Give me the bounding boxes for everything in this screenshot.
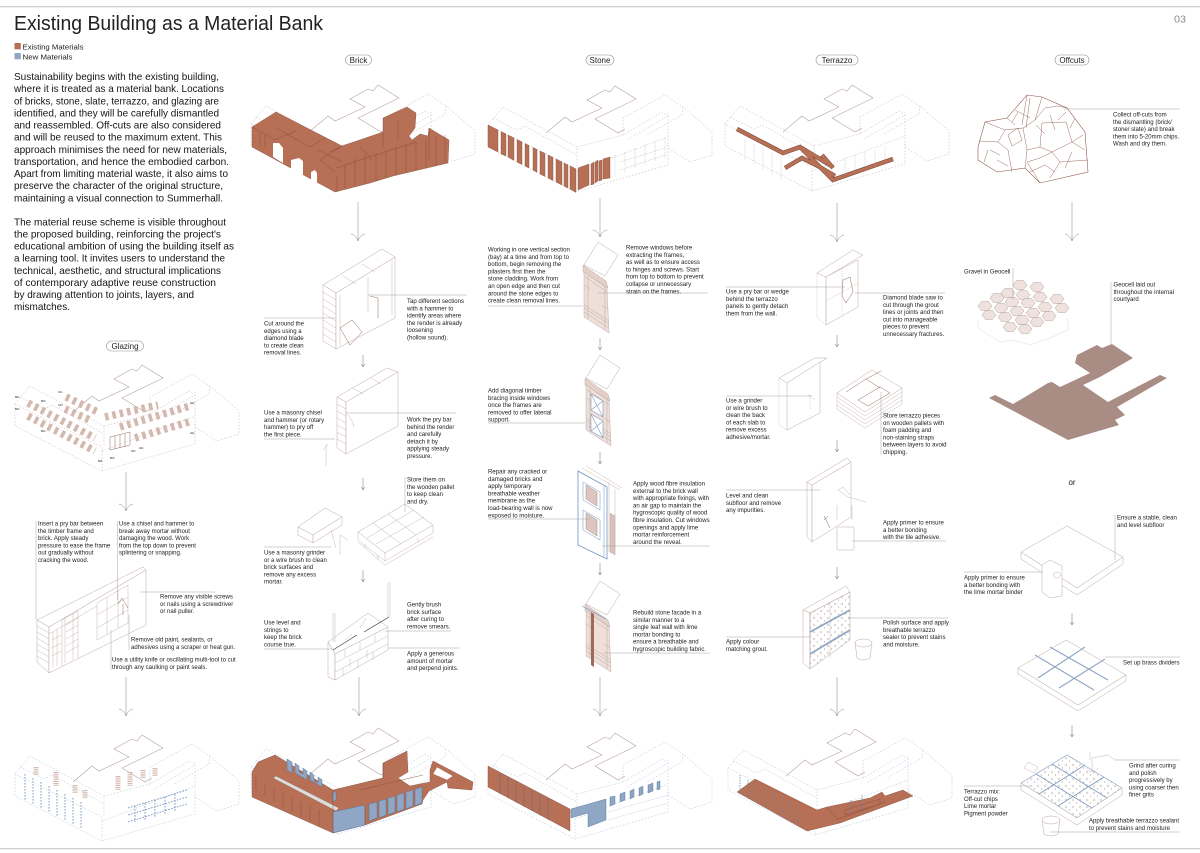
panel: brick <box>251 55 475 834</box>
callouts terrazzo step 2: non-staining straps <box>883 435 934 441</box>
callouts glazing: Use a utility knife or oscillating multi-tool to cut <box>112 658 236 664</box>
callouts stone step 3: damaged bricks and <box>488 477 542 483</box>
callouts stone step 3: external to the brick wall <box>633 489 698 495</box>
callouts stone step 3: apply temporary <box>488 484 532 490</box>
page number: 03 <box>1174 14 1186 26</box>
arrow <box>1065 202 1079 241</box>
subfloor slab <box>1021 526 1123 598</box>
arrow <box>119 472 133 511</box>
stone existing building drawing <box>488 86 712 192</box>
callouts terrazzo step 1: Use a pry bar or wedge <box>726 290 789 296</box>
or label: or <box>1068 478 1076 487</box>
callouts glazing: brick. Apply steady <box>38 536 89 542</box>
arrow <box>835 440 839 452</box>
callouts stone step 3: openings and apply lime <box>633 525 699 531</box>
callouts brick step 1: with a hammer to <box>406 306 454 312</box>
callouts brick step 2: applying steady <box>407 447 450 453</box>
callouts brick step 1: (hollow sound). <box>407 336 448 342</box>
callouts terrazzo step 4: Apply colour <box>726 640 759 646</box>
offcuts heading <box>1055 55 1089 65</box>
title: Existing Building as a Material Bank <box>14 13 324 35</box>
callouts terrazzo step 3: Level and clean <box>726 494 768 500</box>
arrow <box>351 202 365 241</box>
callouts glazing <box>36 521 236 671</box>
callouts glazing: Remove any visible screws <box>160 594 233 600</box>
callouts brick step 3 <box>264 477 455 586</box>
callouts brick step 2 <box>264 410 456 460</box>
intro text: and will be reused to the maximum extent. This <box>14 133 222 144</box>
callouts stone step 1: create clean removal lines. <box>488 299 560 305</box>
callouts brick step 3: Store them on <box>407 478 445 484</box>
callouts finished slab: Lime mortar <box>964 804 996 810</box>
intro text: The material reuse scheme is visible throughout <box>14 217 226 228</box>
glazing existing building drawing: C02 <box>58 404 63 407</box>
callouts terrazzo step 4 <box>726 618 950 653</box>
callouts stone step 3: Apply wood fibre insulation <box>633 482 705 488</box>
callouts stone step 1: to hinges and screws. Start <box>626 267 699 273</box>
callouts terrazzo step 2: on wooden pallets with <box>883 421 944 427</box>
arrow <box>830 203 844 242</box>
callouts glazing: or nail puller. <box>160 609 195 615</box>
terrazzo heading: Terrazzo <box>822 56 853 65</box>
callouts terrazzo step 1 <box>726 287 945 338</box>
callouts subfloor: and level subfloor <box>1117 523 1164 529</box>
callout stone step 4: single leaf wall with lime <box>633 625 698 631</box>
callouts geocell: throughout the internal <box>1114 290 1174 296</box>
callouts stone step 3: an air gap to maintain the <box>633 503 702 509</box>
callout stone step 2: Add diagonal timber <box>488 388 542 394</box>
geocell drawing <box>978 280 1069 345</box>
callouts brick step 1: diamond blade <box>264 336 304 342</box>
brick step 1 wall <box>323 249 395 349</box>
panel: stone <box>488 55 712 839</box>
callout rubble: them into 5-20mm chips. <box>1113 134 1180 140</box>
callouts brick step 4: brick surface <box>407 610 442 616</box>
callouts terrazzo step 3: Apply primer to ensure <box>883 520 944 526</box>
callout dividers <box>1105 657 1180 666</box>
glazing existing building drawing: A02 <box>190 432 195 435</box>
callouts terrazzo step 4: matching grout. <box>726 647 768 653</box>
callouts terrazzo step 2: adhesive/mortar. <box>726 435 771 441</box>
callouts subfloor: Apply primer to ensure <box>964 576 1025 582</box>
callouts stone step 3 <box>488 470 710 546</box>
callouts terrazzo step 2: or wire brush to <box>726 406 768 412</box>
callouts glazing: break away mortar without <box>119 529 190 535</box>
arrow <box>361 355 365 367</box>
callouts brick step 1: to create clean <box>264 343 304 349</box>
callouts terrazzo step 1: behind the terrazzo <box>726 297 778 303</box>
stone step 3 insulation layers <box>578 466 622 559</box>
callouts finished slab: Terrazzo mix: <box>964 790 1000 796</box>
callout dividers: Set up brass dividers <box>1123 660 1179 666</box>
terrazzo step 4 finished panel <box>803 586 872 669</box>
callouts stone step 3: hygroscopic quality of wood <box>633 511 707 517</box>
glazing existing building drawing: B03 <box>41 400 46 403</box>
intro text: transportation, and hence the embodied carbon. <box>14 157 229 168</box>
callouts brick step 2: the first piece. <box>264 432 302 438</box>
callouts brick step 3: to keep clean <box>407 492 443 498</box>
glazing heading: Glazing <box>111 342 139 351</box>
callouts subfloor: the lime mortar binder <box>964 590 1023 596</box>
callouts terrazzo step 1: unnecessary fractures. <box>883 332 944 338</box>
slab with brass dividers <box>1018 640 1126 711</box>
callouts brick step 2: Work the pry bar <box>407 418 452 424</box>
callouts finished slab: progressively by <box>1129 778 1174 784</box>
arrow <box>1070 725 1074 737</box>
callouts stone step 1: pilasters first then the <box>488 269 546 275</box>
callouts brick step 4: remove smears. <box>407 624 451 630</box>
intro text: preserve the character of the original structure, <box>14 181 223 192</box>
intro text: maintaining a visual connection to Summerhall. <box>14 193 223 204</box>
callout stone step 2: support. <box>488 418 510 424</box>
intro text: Sustainability begins with the existing building, <box>14 72 219 83</box>
callouts terrazzo step 4: Polish surface and apply <box>883 620 950 626</box>
glazing existing building drawing: A01 <box>190 402 195 405</box>
callouts brick step 4: Use level and <box>264 620 301 626</box>
callout stone step 2 <box>488 388 585 424</box>
callouts finished slab: to prevent stains and moisture <box>1089 826 1171 832</box>
terrazzo step 3 wall and tools <box>807 458 866 550</box>
intro text: the proposed building, reinforcing the project's <box>14 229 221 240</box>
callouts brick step 4: Gently brush <box>407 602 441 608</box>
callouts brick step 2: Use a masonry chisel <box>264 410 322 416</box>
callout rubble: Collect off-cuts from <box>1113 112 1167 118</box>
callouts glazing: pressure to ease the frame <box>38 543 111 549</box>
glazing result building <box>15 735 239 841</box>
callouts brick step 1: Tap different sections <box>407 299 464 305</box>
callouts finished slab: Grind after curing <box>1129 764 1176 770</box>
callouts finished slab: using coarser then <box>1129 785 1179 791</box>
callouts terrazzo step 2: foam padding and <box>883 428 931 434</box>
callouts stone step 1: stone cladding. Work from <box>488 277 558 283</box>
stone step 1 facade <box>583 242 618 333</box>
brick step 3: brick and pallet <box>298 504 433 565</box>
callout rubble: stone/ slate) and break <box>1113 127 1175 133</box>
callouts terrazzo step 3: subfloor and remove <box>726 501 782 507</box>
callouts stone step 1: strain on the frames. <box>626 289 681 295</box>
arrow <box>593 677 607 716</box>
arrow <box>598 338 602 350</box>
brick existing building drawing <box>251 85 475 192</box>
callout stone step 2: once the frames are <box>488 403 542 409</box>
terrazzo existing building drawing <box>725 85 949 191</box>
callouts terrazzo step 4: sealer to prevent stains <box>883 635 946 641</box>
intro text <box>13 72 234 313</box>
terrazzo result building <box>728 729 952 835</box>
callouts stone step 3: load-bearing wall is now <box>488 506 553 512</box>
callouts stone step 1: from top to bottom to prevent <box>626 275 704 281</box>
legend: Existing Materials <box>22 42 84 52</box>
panel: terrazzo <box>725 55 952 835</box>
callouts stone step 3: exposed to moisture. <box>488 513 544 519</box>
callouts brick step 1: loosening <box>407 328 433 334</box>
callouts terrazzo step 1: cut into manageable <box>883 317 938 323</box>
arrow <box>1070 613 1074 625</box>
callouts brick step 2: and hammer (or rotary <box>264 418 325 424</box>
callouts terrazzo step 2: remove excess <box>726 428 767 434</box>
brick step 4 wall with strings <box>328 582 390 680</box>
callout rubble <box>1064 109 1180 148</box>
arrow <box>830 677 844 716</box>
callouts geocell: Gravel in Geocell <box>964 270 1010 276</box>
callouts brick step 1: Cut around the <box>264 322 305 328</box>
callouts brick step 4: and perpend joints. <box>407 666 459 672</box>
callouts terrazzo step 3: with the tile adhesive. <box>882 535 941 541</box>
callouts finished slab: Off-cut chips <box>964 797 998 803</box>
callouts stone step 3: fibre insulation. Cut windows <box>633 518 710 524</box>
callouts stone step 3: around the reveal. <box>633 540 682 546</box>
callouts terrazzo step 3: a better bonding <box>883 528 927 534</box>
callouts brick step 1: the render is already <box>407 321 463 327</box>
callouts stone step 1: as well as to ensure access <box>626 260 700 266</box>
callouts stone step 3: Repair any cracked or <box>488 470 547 476</box>
glazing existing building drawing: A03 <box>131 450 136 453</box>
glazing existing building drawing: B05 <box>110 457 115 460</box>
callouts terrazzo step 1: pieces to prevent <box>883 325 929 331</box>
callouts finished slab: finer grits <box>1129 793 1154 799</box>
callouts brick step 1: identify areas where <box>407 314 462 320</box>
intro text: and reassembled. Off-cuts are also considered <box>14 120 221 132</box>
callouts brick step 2: hammer) to pry off <box>264 425 314 431</box>
callout rubble: Wash and dry them. <box>1113 142 1167 148</box>
callouts subfloor <box>964 515 1177 596</box>
callouts brick step 1 <box>264 295 467 357</box>
legend: New Materials <box>22 52 73 61</box>
callouts terrazzo step 3 <box>726 490 946 541</box>
callouts glazing: out gradually without <box>38 551 94 557</box>
stone result building <box>488 733 712 839</box>
callouts terrazzo step 1: cut through the grout <box>883 303 939 309</box>
glazing existing building drawing: B01 <box>15 396 20 399</box>
callouts brick step 4: keep the brick <box>264 635 303 641</box>
terrazzo step 1 wall <box>817 250 863 325</box>
callouts glazing: cracking the wood. <box>38 558 89 564</box>
callouts terrazzo step 2: clean the back <box>726 413 766 419</box>
callouts subfloor: a better bonding with <box>964 583 1020 589</box>
callouts brick step 4: after curing to <box>407 617 445 623</box>
top rule <box>0 6 1200 7</box>
callouts stone step 1: (bay) at a time and from top to <box>488 255 570 261</box>
callouts stone step 1: an open edge and then cut <box>488 284 560 290</box>
callouts terrazzo step 3: any impurities. <box>726 508 765 514</box>
legend <box>14 42 84 61</box>
callouts brick step 1: edges using a <box>264 329 302 335</box>
callouts terrazzo step 2: Store terrazzo pieces <box>883 414 940 420</box>
rubble pile drawing <box>978 95 1088 183</box>
callouts stone step 1: collapse or unnecessary <box>626 282 692 288</box>
callouts brick step 2: behind the render <box>407 425 454 431</box>
stone step 4 facade rebuild <box>582 581 620 672</box>
callouts brick step 4 <box>264 602 460 672</box>
intro text: of contemporary adaptive reuse construction <box>14 278 216 289</box>
callouts terrazzo step 4: breathable terrazzo <box>883 628 936 634</box>
callouts glazing: Insert a pry bar between <box>38 522 103 528</box>
callouts terrazzo step 2 <box>726 392 947 456</box>
arrow <box>835 567 839 579</box>
callouts subfloor: Ensure a stable, clean <box>1117 516 1177 522</box>
glazing existing building drawing <box>15 365 239 471</box>
callouts finished slab: Apply breathable terrazzo sealant <box>1089 818 1179 824</box>
callouts terrazzo step 2: chipping. <box>883 450 908 456</box>
callouts terrazzo step 1: lines or joints and then <box>883 310 944 316</box>
intro text: educational ambition of using the building itself as <box>14 242 234 253</box>
glazing existing building drawing: B04 <box>41 430 46 433</box>
intro text: identified, and they will be carefully dismantled <box>14 108 219 119</box>
callout stone step 4: similar manner to a <box>633 618 685 624</box>
callouts glazing: through any caulking or paint seals. <box>112 665 207 671</box>
callouts brick step 3: brick surfaces and <box>264 565 313 571</box>
courtyard plan shape <box>989 344 1167 440</box>
callouts terrazzo step 4: and moisture. <box>883 642 920 648</box>
intro text: Apart from limiting material waste, it also aims to <box>14 169 228 180</box>
callouts brick step 4: amount of mortar <box>407 659 453 665</box>
callouts glazing: splintering or snapping. <box>119 551 182 557</box>
brick heading: Brick <box>350 56 368 65</box>
callouts stone step 1 <box>488 246 708 306</box>
intro text: by drawing attention to joints, layers, and <box>14 290 194 301</box>
callout stone step 4: ensure a breathable and <box>633 640 699 646</box>
glazing existing building drawing: B06 <box>98 460 103 463</box>
arrow <box>352 677 366 716</box>
callouts glazing: or nails using a screwdriver <box>160 602 233 608</box>
callout stone step 4: mortar bonding to <box>633 632 681 638</box>
callouts brick step 2: and carefully <box>407 432 442 438</box>
callouts glazing: adhesives using a scraper or heat gun. <box>131 645 236 651</box>
callout stone step 2: bracing inside windows <box>488 396 550 402</box>
callouts stone step 1: Remove windows before <box>626 246 693 252</box>
glazing existing building drawing: A04 <box>139 447 144 450</box>
callouts finished slab: Pigment powder <box>964 811 1008 817</box>
callouts glazing: from the top down to prevent <box>119 543 196 549</box>
callouts brick step 2: detach it by <box>407 439 439 445</box>
intro text: technical, aesthetic, and structural implications <box>14 266 221 277</box>
callouts stone step 1: extracting the frames, <box>626 253 684 259</box>
callout stone step 4: hygroscopic building fabric. <box>633 647 706 653</box>
arrow <box>598 563 602 575</box>
callouts glazing: damaging the wood. Work <box>119 536 190 542</box>
brick heading <box>346 55 372 65</box>
callouts brick step 2: pressure. <box>407 454 433 460</box>
callouts stone step 1: around the stone edges to <box>488 291 559 297</box>
callouts stone step 3: breathable weather <box>488 491 540 497</box>
callout stone step 4 <box>604 610 710 653</box>
callouts geocell: courtyard <box>1114 297 1139 303</box>
callouts terrazzo step 1: panels to gently detach <box>726 304 788 310</box>
callouts glazing: Remove old paint, sealants, or <box>131 638 213 644</box>
glazing wall drawing <box>37 567 146 673</box>
brick result building <box>251 728 475 834</box>
callouts brick step 3: Use a masonry grinder <box>264 550 325 556</box>
stone heading: Stone <box>590 56 611 65</box>
callouts brick step 4: Apply a generous <box>407 652 454 658</box>
callouts geocell <box>964 268 1174 345</box>
callouts finished slab: and polish <box>1129 771 1157 777</box>
glazing heading <box>106 341 144 351</box>
callouts terrazzo step 2: Use a grinder <box>726 398 762 404</box>
intro text: a learning tool. It invites users to understand the <box>14 254 225 265</box>
callouts stone step 1: bottom, begin removing the <box>488 262 562 268</box>
callouts glazing: the timber frame and <box>38 529 94 535</box>
offcuts heading: Offcuts <box>1059 56 1085 65</box>
callouts brick step 3: remove any excess <box>264 572 316 578</box>
callouts brick step 3: or a wire brush to clean <box>264 558 327 564</box>
callouts brick step 1: removal lines. <box>264 351 302 357</box>
intro text: where it is treated as a material bank. Locations <box>13 84 224 95</box>
panel: offcuts <box>964 55 1180 836</box>
arrow <box>835 335 839 347</box>
callouts stone step 3: with appropriate fixings, with <box>632 496 709 502</box>
callout rubble: the dismantling (brick/ <box>1113 120 1172 126</box>
arrow <box>119 677 133 716</box>
brick step 2 wall <box>323 368 398 466</box>
bottom rule <box>0 848 1200 849</box>
callout stone step 2: removed to offer laterial <box>488 410 551 416</box>
glazing existing building drawing: B02 <box>15 408 20 411</box>
arrow <box>598 452 602 464</box>
callouts terrazzo step 2: of each slab to <box>726 420 766 426</box>
intro text: of bricks, stone, slate, terrazzo, and glazing are <box>14 96 219 107</box>
callouts brick step 3: mortar. <box>264 580 283 586</box>
finished terrazzo slab <box>1021 752 1122 836</box>
arrow <box>361 570 365 582</box>
intro text: mismatches. <box>14 302 70 313</box>
panel: glazing <box>15 341 239 841</box>
stone step 2 facade with bracing <box>585 355 620 446</box>
callouts stone step 3: membrane as the <box>488 499 536 505</box>
terrazzo heading <box>816 55 858 65</box>
callouts stone step 3: mortar reinforcement <box>633 533 689 539</box>
callouts terrazzo step 1: Diamond blade saw to <box>883 296 943 302</box>
stone heading <box>586 55 614 65</box>
callouts geocell: Geocell laid out <box>1114 282 1156 288</box>
callouts glazing: Use a chisel and hammer to <box>119 522 195 528</box>
callouts finished slab <box>964 760 1180 832</box>
callouts terrazzo step 1: them from the wall. <box>726 311 777 317</box>
intro text: approach minimises the need for new materials, <box>14 145 227 156</box>
callouts brick step 3: and dry. <box>407 499 429 505</box>
glazing existing building drawing: C01 <box>58 391 63 394</box>
callouts brick step 4: course true. <box>264 642 296 648</box>
terrazzo step 2 wall and panel stack <box>779 358 902 430</box>
callouts brick step 4: strings to <box>264 628 289 634</box>
callouts brick step 3: the wooden pallet <box>407 485 455 491</box>
callout stone step 4: Rebuild stone facade in a <box>633 610 702 616</box>
arrow <box>593 198 607 237</box>
callouts terrazzo step 2: between layers to avoid <box>883 443 947 449</box>
callouts stone step 1: Working in one vertical section <box>488 248 570 254</box>
arrow <box>361 478 365 490</box>
